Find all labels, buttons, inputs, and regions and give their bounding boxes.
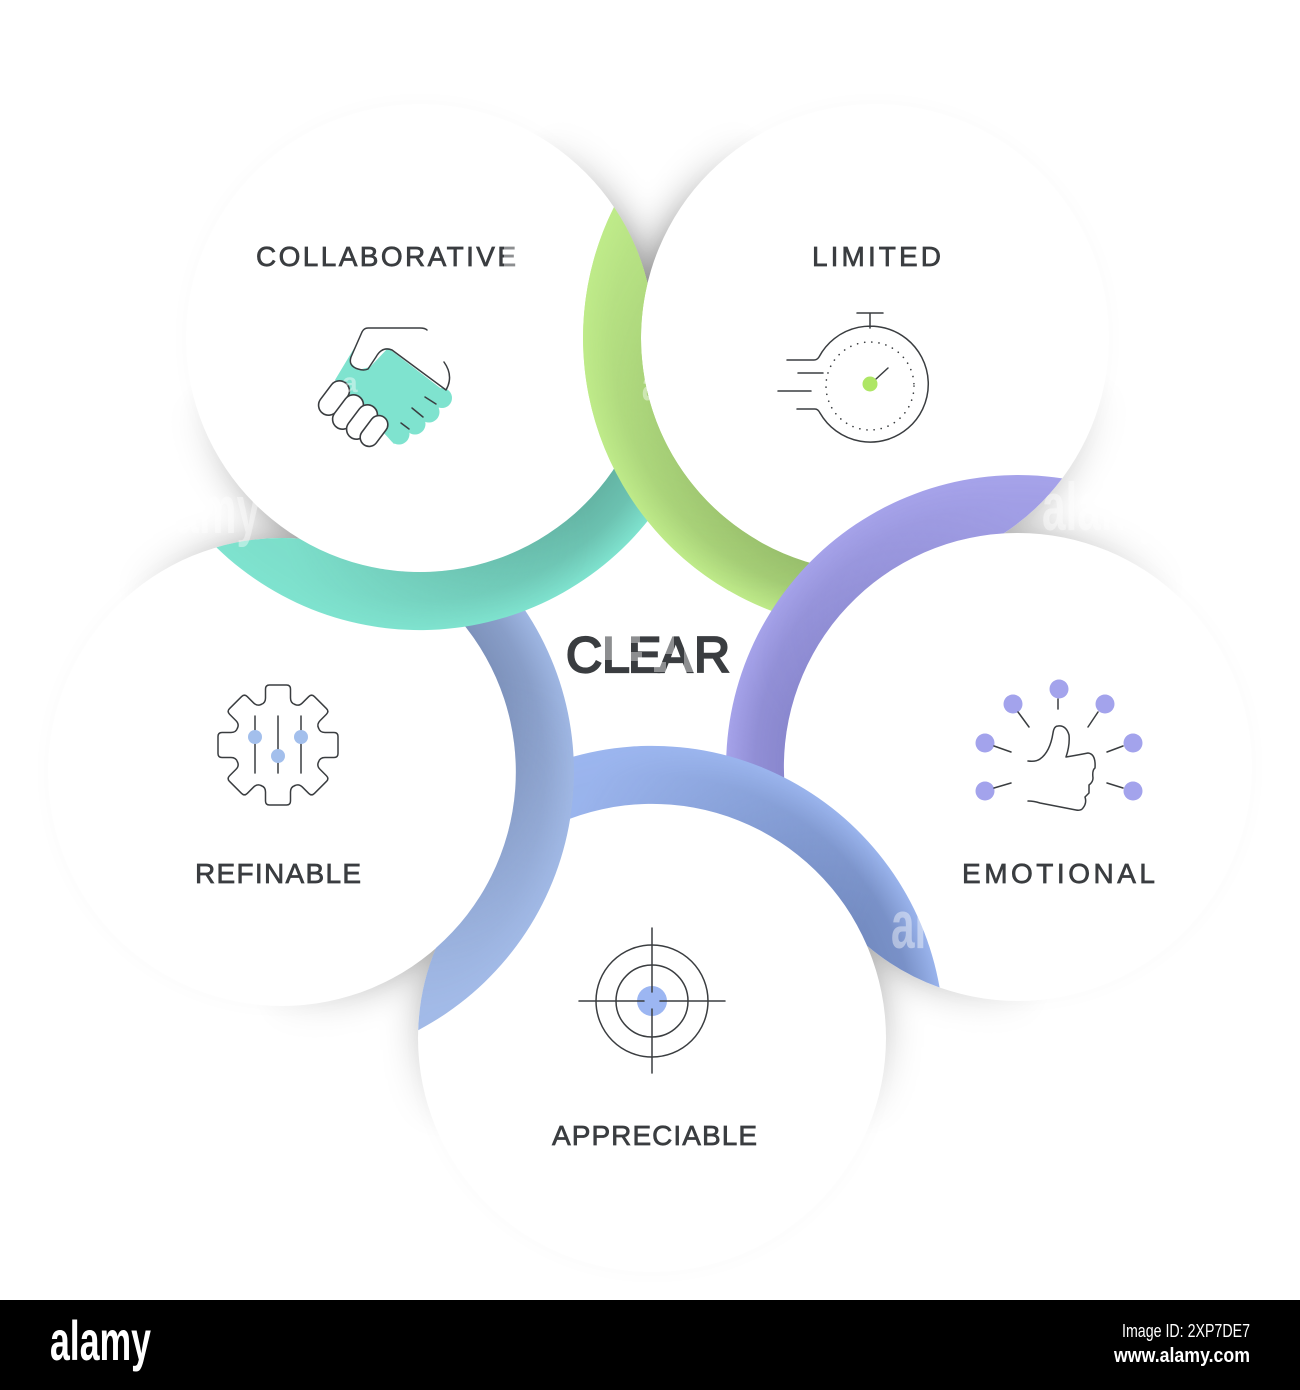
footer website: www.alamy.com xyxy=(1113,1345,1250,1367)
label: emotional: EMOTIONAL xyxy=(962,858,1155,889)
ring: purple arc xyxy=(726,475,1062,796)
circle: collaborative xyxy=(186,104,654,572)
watermark fragments: alamy xyxy=(1042,469,1162,545)
watermark fragments xyxy=(140,244,1162,963)
icon: stopwatch xyxy=(778,313,928,442)
watermark fragments: alamy xyxy=(642,361,720,410)
footer image id: Image ID: 2XP7DE7 xyxy=(1122,1321,1250,1341)
label: collaborative: COLLABORATIVE xyxy=(256,241,516,272)
center title: CLEAR xyxy=(566,627,730,683)
watermark fragments: alamy xyxy=(140,472,260,548)
ring: blue arc xyxy=(535,746,940,988)
circle: emotional xyxy=(784,533,1252,1001)
watermark fragments: a xyxy=(342,367,358,398)
icon: target xyxy=(579,928,725,1073)
icon: gear with sliders xyxy=(218,685,338,805)
label: appreciable: APPRECIABLE xyxy=(552,1120,757,1151)
ring: slate blue arc xyxy=(418,582,574,1030)
circle: limited xyxy=(641,104,1109,572)
footer band xyxy=(0,1300,1300,1390)
ring: teal arc xyxy=(216,461,668,630)
circle: appreciable xyxy=(418,804,886,1272)
icon: thumbs up xyxy=(976,680,1142,810)
label: refinable: REFINABLE xyxy=(195,858,361,889)
icon: handshake xyxy=(315,328,452,450)
watermark fragments: alamy xyxy=(891,887,1011,963)
label: limited: LIMITED xyxy=(812,241,941,272)
ring: green upper arc xyxy=(583,207,758,591)
ring: green lower arc xyxy=(583,207,810,611)
circle: refinable xyxy=(48,538,516,1006)
footer logo: alamy xyxy=(50,1309,151,1372)
